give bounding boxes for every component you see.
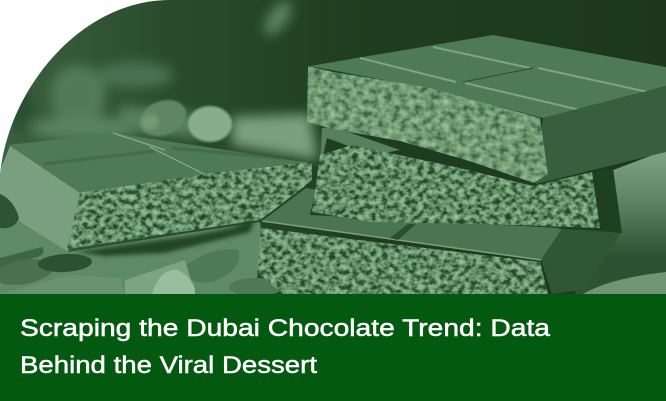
hero photo: chocolate bars in green duotone [0, 0, 666, 296]
left chocolate bar [0, 133, 312, 252]
middle chocolate bar [310, 127, 622, 233]
right background surface [575, 150, 666, 294]
top chocolate bar [307, 35, 666, 184]
title band [0, 294, 666, 401]
blurred background nuts [6, 0, 318, 160]
title: Behind the Viral Dessert [20, 352, 317, 379]
leaf at lower right [583, 272, 666, 294]
bottom chocolate bar [257, 188, 622, 294]
title [20, 315, 551, 379]
pistachio nuts on left bar [140, 99, 233, 144]
table surface and cocoa beans [0, 194, 283, 296]
title: Scraping the Dubai Chocolate Trend: Data [20, 315, 551, 342]
